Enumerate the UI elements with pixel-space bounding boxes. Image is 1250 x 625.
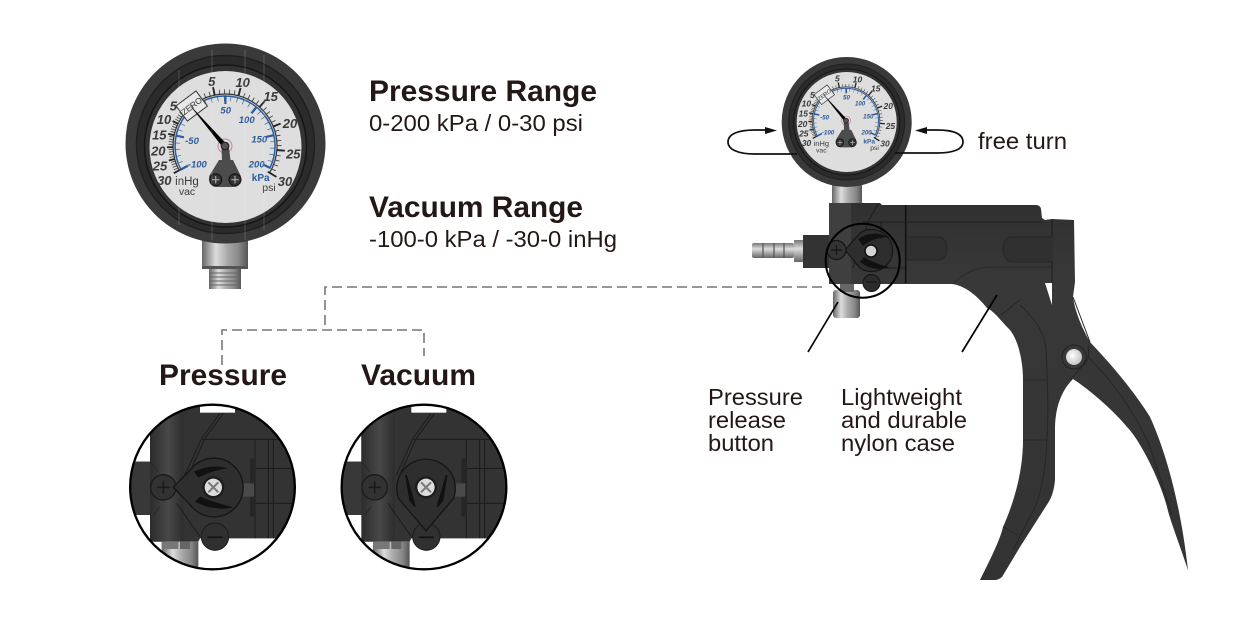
label: lightweight and durable nylon case: and durable: [841, 407, 967, 433]
small gauge dial: 25: [885, 121, 895, 131]
text block: vacuum range: [369, 191, 617, 252]
inHg labels: [150, 99, 178, 188]
kPa labels: 50: [220, 106, 232, 116]
handle pivot pin: [1062, 345, 1086, 369]
small gauge dial: [797, 74, 895, 155]
small gauge dial: inHg: [814, 139, 829, 148]
psi labels: 10: [235, 75, 251, 90]
small gauge stem: [832, 183, 862, 204]
small gauge dial: -100: [822, 130, 835, 137]
psi and inHg scale: [167, 87, 285, 177]
selector screw: [202, 476, 224, 498]
small gauge dial: -50: [820, 115, 830, 122]
needle: [188, 103, 227, 148]
psi labels: 5: [208, 74, 216, 89]
label: free turn: free turn: [978, 128, 1067, 154]
kPa labels: -50: [185, 136, 200, 147]
unit labels: psi: [262, 182, 276, 194]
small gauge dial: vac: [816, 148, 827, 155]
small gauge dial: 20: [883, 101, 893, 111]
gauge dial face: [150, 71, 302, 223]
small gauge dial: 5: [835, 74, 840, 84]
small gauge dial: 15: [871, 83, 881, 93]
kPa labels: 100: [239, 115, 255, 126]
inHg labels: 15: [152, 127, 167, 142]
handle gap: [1045, 283, 1052, 305]
arrow: free turn right loop: [895, 127, 963, 153]
kPa labels: -100: [188, 160, 208, 170]
heading: vacuum mode: Vacuum: [361, 359, 476, 392]
unit labels: inHg: [175, 176, 199, 188]
zero adjust window: [176, 91, 207, 121]
small gauge dial: 10: [802, 98, 811, 108]
lever pointing left: [173, 458, 243, 517]
label: pressure release button: button: [708, 430, 774, 456]
psi labels: 15: [263, 89, 279, 104]
text block: pressure range: 0-200 kPa / 0-30 psi: [369, 110, 583, 136]
small gauge dial: 200: [860, 130, 872, 137]
text block: vacuum range: -100-0 kPa / -30-0 inHg: [369, 226, 617, 252]
bracket screws: [210, 174, 241, 186]
psi labels: 25: [285, 147, 301, 162]
small gauge face: [797, 72, 897, 172]
psi labels: 20: [282, 116, 298, 131]
kPa labels: 150: [251, 134, 268, 146]
inHg labels: 10: [157, 112, 172, 127]
dashed connector from valve to modes: [222, 287, 822, 365]
gauge stem fitting: [202, 240, 248, 289]
small gauge dial: 100: [855, 101, 866, 108]
label: pressure release button: release: [708, 407, 786, 433]
label: lightweight and durable nylon case: nylon case: [841, 430, 955, 456]
leader line: pressure release button: [808, 302, 838, 352]
small gauge dial: 50: [843, 95, 850, 102]
bezel highlights: [179, 50, 264, 240]
arrow: free turn left loop: [728, 127, 797, 154]
kPa labels: 200: [248, 160, 265, 170]
label: lightweight and durable nylon case: Lightweight: [841, 384, 962, 410]
inHg labels: 5: [170, 99, 178, 114]
gauge: large pressure and vacuum dial: [126, 44, 326, 289]
small gauge dial: 5: [810, 90, 815, 100]
needle bracket: [209, 148, 241, 187]
small gauge dial: 15: [799, 108, 808, 118]
text block: pressure range: [369, 75, 597, 136]
selector screw: [415, 476, 437, 498]
unit labels: [175, 173, 276, 198]
body detail lines and slots: [829, 203, 1172, 550]
inHg labels: 30: [157, 173, 172, 188]
zero adjust window: ZERO: [179, 95, 204, 117]
small gauge dial: ZERO: [817, 88, 833, 102]
small gauge dial: 30: [880, 139, 890, 149]
leader line: nylon case: [962, 295, 997, 352]
text block: vacuum range: Vacuum Range: [369, 191, 583, 224]
small gauge dial: kPa: [863, 138, 875, 145]
lever pointing down: [397, 459, 455, 531]
heading: pressure mode: Pressure: [159, 359, 287, 392]
detail: valve in vacuum position: [340, 404, 508, 570]
kPa scale: [175, 96, 275, 170]
label: pressure release button: Pressure: [708, 384, 803, 410]
psi labels: 30: [278, 174, 293, 189]
small gauge dial: 30: [802, 138, 812, 148]
label: lightweight and durable nylon case: [841, 384, 967, 456]
hose barb fitting: [752, 235, 831, 268]
pressure release button: [833, 284, 860, 318]
small gauge: [782, 57, 912, 187]
unit labels: vac: [179, 186, 195, 198]
pump body and handle: [829, 203, 1188, 580]
gauge rubber bezel: [126, 44, 326, 244]
small gauge dial: 25: [798, 129, 809, 139]
small gauge dial: 20: [797, 119, 808, 129]
small gauge dial: 150: [863, 113, 874, 120]
pump assembly: [752, 57, 1188, 580]
small gauge bezel: [782, 57, 912, 187]
label: pressure release button: [708, 384, 803, 456]
small gauge dial: psi: [870, 145, 879, 152]
valve close-up ring and lever: [826, 224, 900, 298]
unit labels: kPa: [252, 173, 270, 184]
kPa labels: [185, 106, 268, 170]
needle hub: [221, 142, 229, 150]
text block: pressure range: Pressure Range: [369, 75, 597, 108]
inHg labels: 20: [150, 144, 166, 159]
gauge dial scales and needle: [150, 74, 301, 198]
small gauge dial: 10: [853, 74, 863, 84]
inHg labels: 25: [152, 159, 168, 174]
pink pivot ring: [218, 139, 232, 153]
detail: valve in pressure position: [129, 404, 296, 570]
psi labels: [208, 74, 301, 189]
